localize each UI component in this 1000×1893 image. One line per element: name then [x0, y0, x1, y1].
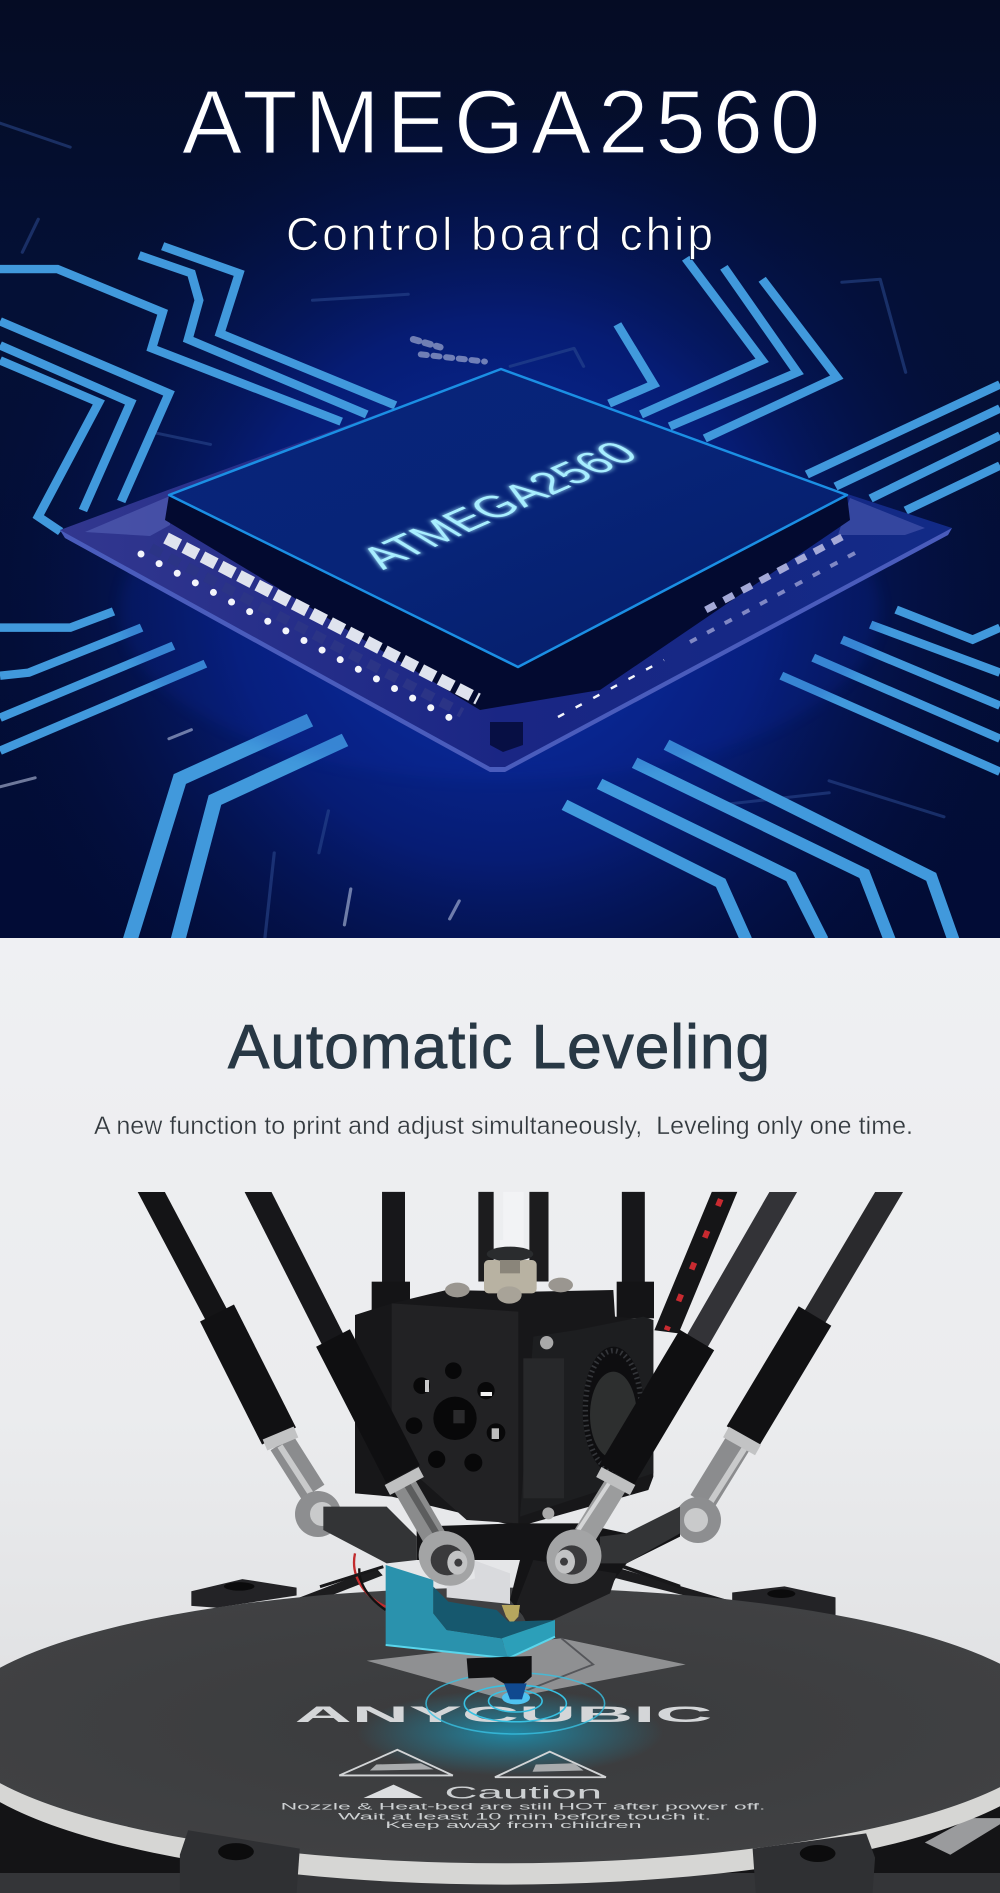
- circuit traces: [0, 246, 1000, 940]
- wires and struts: [320, 1553, 680, 1610]
- chip label: ATMEGA2560: [348, 435, 649, 575]
- plate caution text: Wait at least 10 min before touch it.: [338, 1812, 711, 1821]
- print bed scene: [0, 1192, 1000, 1893]
- left pin row: [141, 538, 478, 719]
- vertical rods and filament wrap: [394, 1192, 737, 1333]
- panel: automatic leveling: [0, 938, 1000, 1893]
- description text: A new function to print and adjust simultaneously, Leveling only one time.: [94, 1112, 913, 1140]
- chip top face: [169, 369, 847, 667]
- teal hot-end bracket: [386, 1565, 555, 1658]
- carriage block: [355, 1290, 653, 1527]
- blower fan: [523, 1347, 644, 1498]
- rear plate brackets: [191, 1568, 836, 1616]
- nozzle: [467, 1656, 532, 1704]
- build plate: [0, 1588, 1000, 1863]
- subheading: control board chip: Control board chip: [286, 208, 713, 260]
- inner right arm: [617, 1182, 789, 1474]
- pneumatic fitting and screws: [445, 1240, 573, 1519]
- chip package: [60, 369, 952, 780]
- background faint circuit details: [0, 123, 944, 940]
- plate caution text: Caution: [445, 1783, 602, 1803]
- effector platform: [323, 1507, 680, 1630]
- plate caution text: Nozzle & Heat-bed are still HOT after power off.: [281, 1802, 765, 1812]
- print head assembly: [320, 1240, 680, 1704]
- inner left arm: [253, 1182, 403, 1474]
- chip body side: [165, 495, 850, 710]
- mounting holes: [406, 1362, 505, 1472]
- inner rod ends: [387, 1472, 633, 1597]
- front plate brackets: [180, 1830, 875, 1893]
- frame under bed: [0, 1782, 1000, 1893]
- heading: automatic leveling: Automatic Leveling: [228, 1013, 770, 1082]
- inner delta arms: [253, 1182, 789, 1474]
- inner left rod end: [387, 1472, 486, 1597]
- heading: ATMEGA2560: ATMEGA2560: [182, 73, 820, 173]
- chip corner notch: [490, 722, 523, 752]
- bed rim: [0, 1603, 1000, 1885]
- outer left delta arm: [146, 1182, 341, 1537]
- white heater block and brass nozzle: [447, 1560, 520, 1624]
- plate caution text: Keep away from children: [385, 1820, 642, 1830]
- outer right delta arm: [675, 1182, 895, 1543]
- right pin row: [558, 537, 855, 717]
- plate warning icons: [339, 1750, 606, 1798]
- plate printed logo: [295, 1638, 712, 1775]
- plate caution text: [281, 1783, 765, 1830]
- panel: ATMEGA2560 chip: [0, 0, 1000, 940]
- inner right rod end: [535, 1472, 633, 1595]
- plate printed logo: ANYCUBIC: [295, 1702, 712, 1727]
- rod bases: [372, 1282, 654, 1318]
- leveling ripple: [426, 1673, 605, 1734]
